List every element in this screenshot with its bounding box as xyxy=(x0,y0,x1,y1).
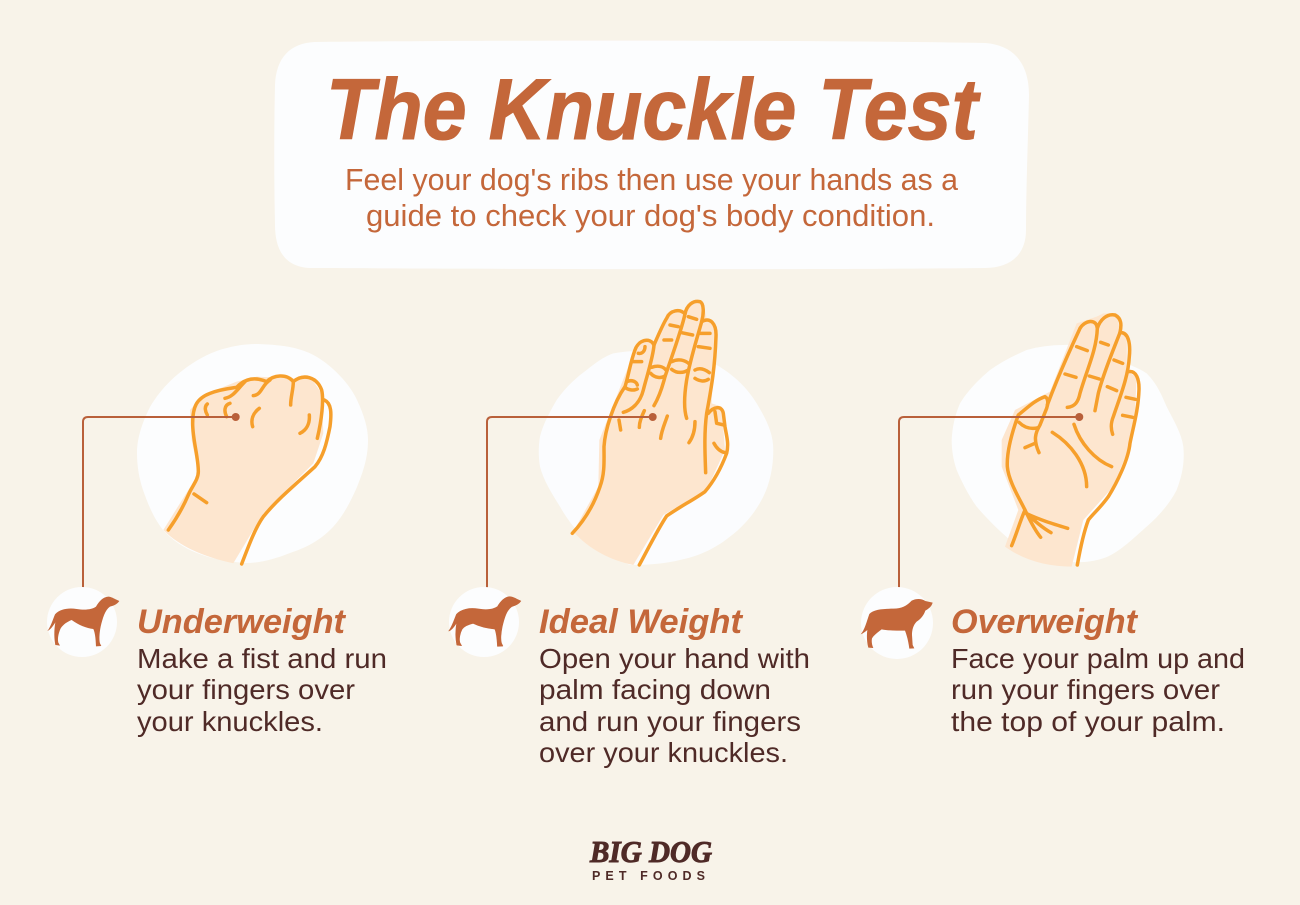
heading: overweight: Overweight xyxy=(951,603,1139,641)
text: ideal weight instructions: Open your hand with xyxy=(539,643,810,674)
icon: ideal dog xyxy=(449,587,521,657)
text: ideal weight instructions: over your knuckles. xyxy=(539,737,788,768)
text: overweight instructions: the top of your palm. xyxy=(951,706,1225,737)
logo: Big Dog Pet Foods xyxy=(589,834,713,883)
heading: ideal weight: Ideal Weight xyxy=(539,603,744,641)
text: ideal weight instructions xyxy=(539,643,810,768)
panel: title card xyxy=(274,41,1029,269)
text: overweight instructions: run your fingers over xyxy=(951,674,1220,705)
callout line and dot xyxy=(899,413,1083,588)
subtitle: guide to check your dog's body condition. xyxy=(366,198,935,233)
heading: underweight: Underweight xyxy=(137,603,347,641)
icon: heavy dog xyxy=(861,587,933,659)
text: ideal weight instructions: palm facing down xyxy=(539,674,771,705)
logo: Big Dog Pet Foods: BIG DOG xyxy=(589,834,713,869)
icon: white blob behind palm xyxy=(952,345,1184,562)
icon: palm up hand xyxy=(1002,313,1139,567)
text: underweight instructions xyxy=(137,643,387,737)
icon: white blob behind fist xyxy=(137,344,368,563)
text: underweight instructions: Make a fist and run xyxy=(137,643,387,674)
text: overweight instructions xyxy=(951,643,1245,737)
icon: fist xyxy=(163,376,331,564)
panel: underweight xyxy=(47,344,387,737)
subtitle: Feel your dog's ribs then use your hands as a xyxy=(345,162,959,197)
icon: white blob behind open hand xyxy=(539,351,773,565)
title: The Knuckle Test xyxy=(326,62,981,158)
text: overweight instructions: Face your palm up and xyxy=(951,643,1245,674)
icon: thin dog xyxy=(47,587,119,657)
callout line and dot xyxy=(83,413,240,588)
callout line and dot xyxy=(487,413,657,588)
text: underweight instructions: your knuckles. xyxy=(137,706,323,737)
text: ideal weight instructions: and run your fingers xyxy=(539,706,801,737)
icon: open hand palm down xyxy=(572,300,728,565)
panel: ideal weight xyxy=(449,300,810,768)
subtitle xyxy=(345,162,959,233)
logo: Big Dog Pet Foods: PET FOODS xyxy=(592,869,705,883)
panel: overweight xyxy=(861,313,1245,737)
text: underweight instructions: your fingers over xyxy=(137,674,355,705)
